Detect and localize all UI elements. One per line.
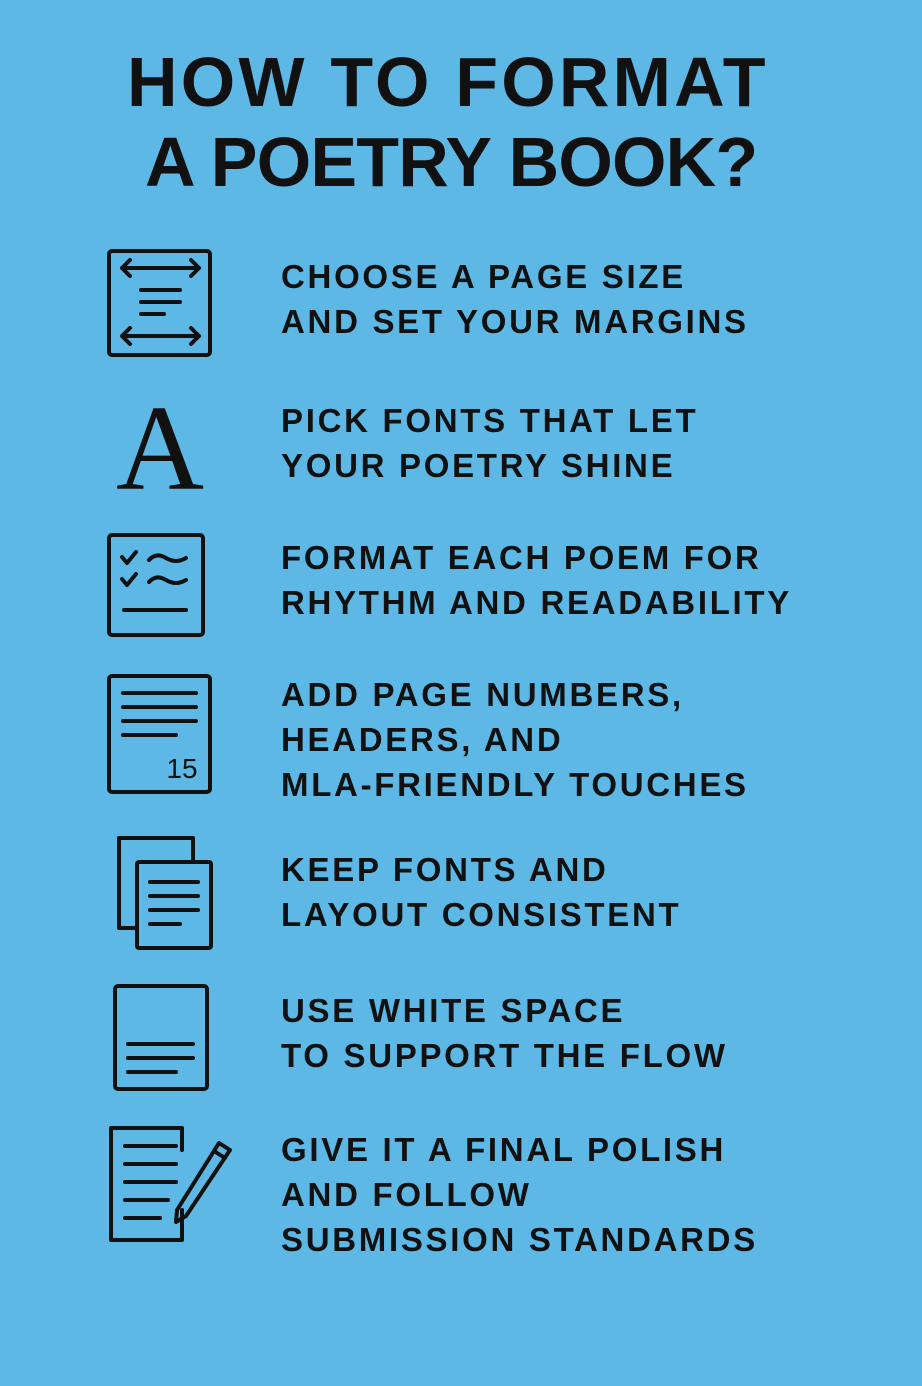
item 7 text: GIVE IT A FINAL POLISH <box>281 1131 726 1168</box>
item 4 text: HEADERS, AND <box>281 721 563 758</box>
icon: page number: 15 <box>166 753 198 784</box>
icon: white space page <box>115 986 207 1089</box>
item 2 text: YOUR POETRY SHINE <box>281 447 675 484</box>
item 3 text: RHYTHM AND READABILITY <box>281 584 792 621</box>
item 6 text: USE WHITE SPACE <box>281 992 625 1029</box>
item 6 text: TO SUPPORT THE FLOW <box>281 1037 728 1074</box>
item 1 text: AND SET YOUR MARGINS <box>281 303 749 340</box>
icon: margins page <box>109 251 210 355</box>
icon: checklist <box>109 535 203 635</box>
item 4 text: ADD PAGE NUMBERS, <box>281 676 684 713</box>
title: HOW TO FORMAT <box>127 43 769 121</box>
item 5 text <box>281 851 681 933</box>
item 7 text <box>281 1131 758 1258</box>
icon: page with pencil <box>111 1128 230 1240</box>
item 1 text: CHOOSE A PAGE SIZE <box>281 258 686 295</box>
item 2 text <box>281 402 698 484</box>
title <box>127 43 769 201</box>
title: A POETRY BOOK? <box>145 123 757 201</box>
item 4 text <box>281 676 749 803</box>
icon: page number <box>109 676 210 792</box>
item 3 text <box>281 539 792 621</box>
icon: letter A: A <box>116 381 204 516</box>
item 4 text: MLA-FRIENDLY TOUCHES <box>281 766 749 803</box>
item 6 text <box>281 992 728 1074</box>
item 5 text: KEEP FONTS AND <box>281 851 609 888</box>
item 7 text: SUBMISSION STANDARDS <box>281 1221 758 1258</box>
item 7 text: AND FOLLOW <box>281 1176 532 1213</box>
icon: stacked pages <box>119 838 211 948</box>
item 1 text <box>281 258 749 340</box>
item 3 text: FORMAT EACH POEM FOR <box>281 539 762 576</box>
item 2 text: PICK FONTS THAT LET <box>281 402 698 439</box>
item 5 text: LAYOUT CONSISTENT <box>281 896 681 933</box>
